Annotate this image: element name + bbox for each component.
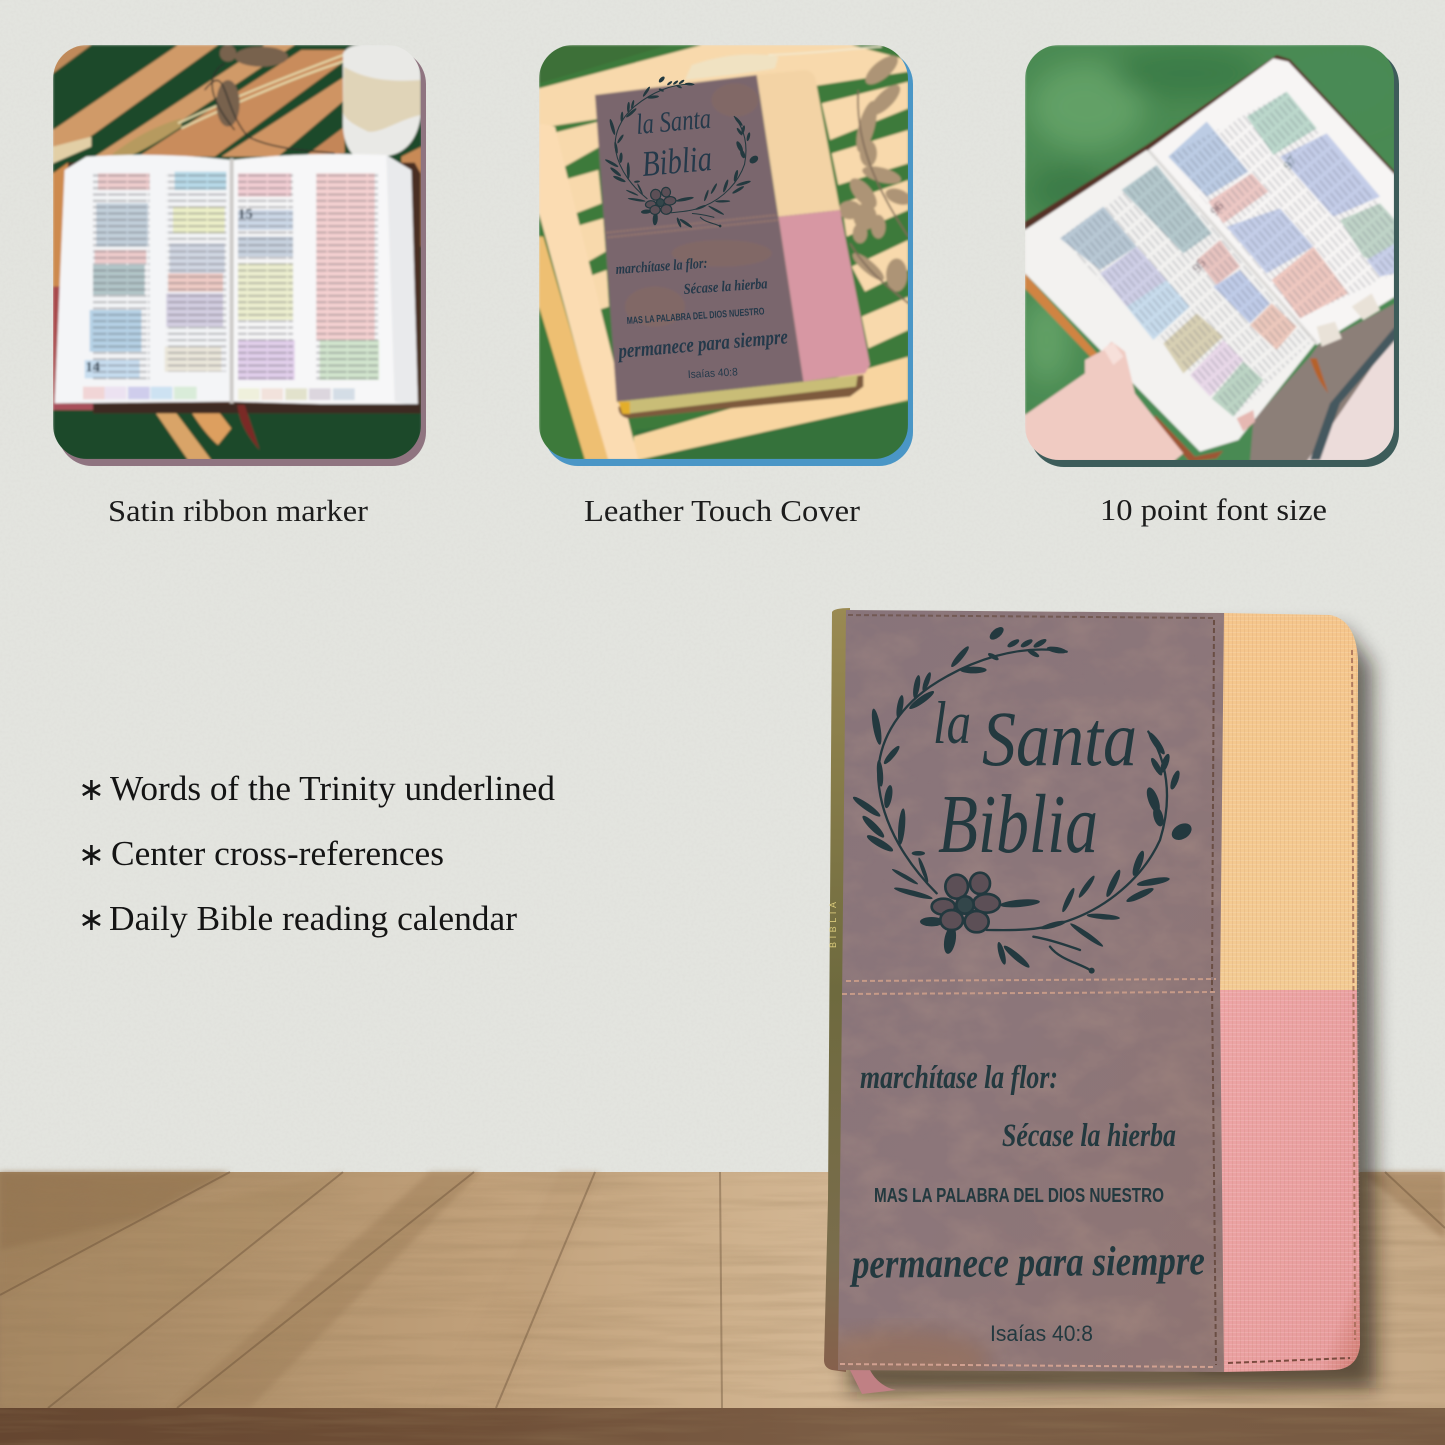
photo: hands holding open Bible: 96 (1208, 199, 1226, 218)
small cover wreath (596, 66, 766, 239)
caption: 10 point font size: 10 point font size (1100, 492, 1327, 527)
cover title and verse: Isaías 40:8 (990, 1321, 1093, 1346)
spine (824, 608, 850, 1372)
photo: open Bible with ribbon marker: 14 (85, 360, 101, 376)
cover title and verse: la (933, 690, 971, 756)
book edges (618, 375, 863, 418)
feature list: Daily Bible reading calendar (109, 899, 517, 938)
feature list (78, 769, 555, 938)
feature list: Words of the Trinity underlined (110, 769, 555, 808)
caption: leather touch cover: Leather Touch Cover (584, 493, 861, 528)
dried leaves (838, 51, 913, 292)
feature list: ∗ (78, 836, 105, 872)
small cover lettering: Isaías 40:8 (688, 366, 738, 381)
small cover lettering (615, 103, 789, 381)
photo: open Bible with ribbon marker: 15 (238, 206, 253, 222)
small cover lettering: Biblia (640, 138, 713, 184)
caption: satin ribbon marker: Satin ribbon marker (108, 493, 369, 528)
small cover lettering: marchítase la flor: (615, 256, 708, 278)
photo: hands holding open Bible: 97 (1281, 154, 1299, 172)
wheat (685, 54, 778, 80)
small cover lettering: permanece para siempre (616, 324, 789, 363)
page highlights (85, 172, 379, 380)
feature list: ∗ (78, 901, 105, 937)
small cover lettering: la Santa (635, 103, 712, 141)
feature list: ∗ (78, 771, 105, 807)
photo: leather touch cover on bench (539, 45, 913, 466)
reference cells (1060, 92, 1395, 417)
cover title and verse: MAS LA PALABRA DEL DIOS NUESTRO (874, 1185, 1164, 1207)
photo: hands holding open Bible (1023, 45, 1399, 467)
peach panel (1218, 613, 1358, 992)
leather panel (838, 610, 1224, 1372)
feature list: Center cross-references (111, 834, 444, 873)
cover title and verse (849, 690, 1205, 1346)
cover title and verse: marchítase la flor: (860, 1060, 1058, 1096)
cover title and verse: permanece para siempre (849, 1238, 1205, 1288)
panel weave texture (1218, 613, 1360, 1372)
cover title and verse: Santa (982, 695, 1137, 782)
floral wreath (851, 625, 1195, 974)
small cover lettering: MAS LA PALABRA DEL DIOS NUESTRO (626, 306, 765, 327)
spine gold lettering: BIBLIA (828, 902, 838, 948)
photo: hands holding open Bible: 95 (1190, 256, 1209, 275)
wooden table (0, 1172, 1445, 1445)
hand (1025, 342, 1183, 462)
cover title and verse: Biblia (938, 778, 1098, 871)
small cover lettering: Sécase la hierba (683, 276, 768, 298)
cover title and verse: Sécase la hierba (1002, 1118, 1176, 1154)
Bible book cover (810, 608, 1376, 1394)
photo: open Bible with ribbon marker (53, 45, 426, 466)
pink panel (1218, 990, 1360, 1372)
